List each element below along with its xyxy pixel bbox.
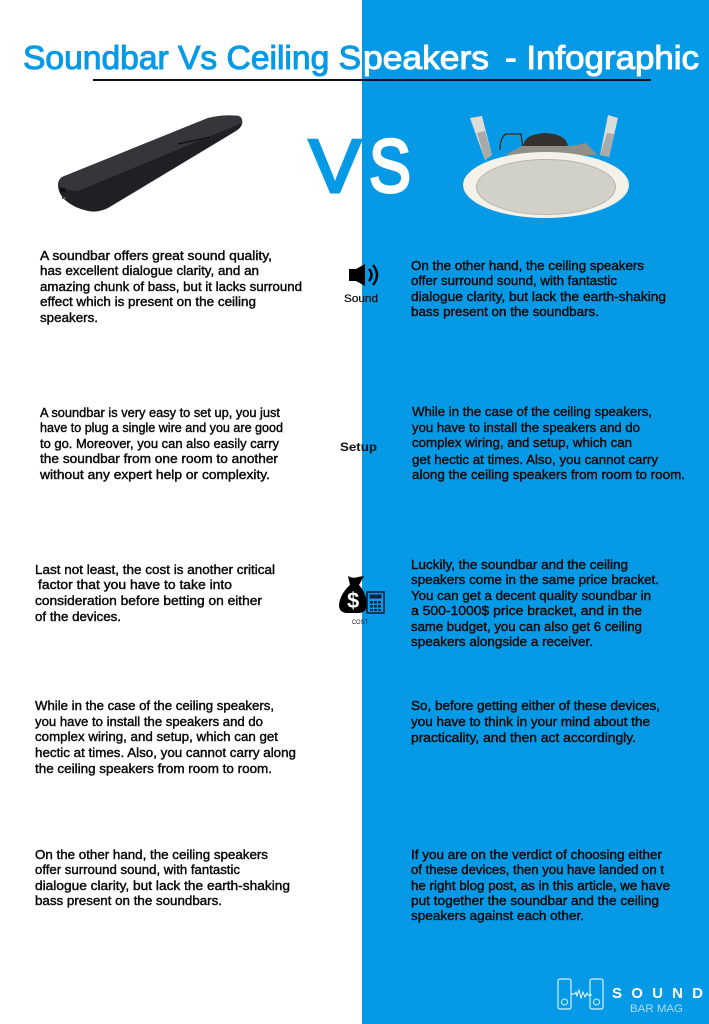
text block: ceiling speakers setup: get hectic at times. Also, you cannot carry xyxy=(412,452,659,467)
icon: soundbar product xyxy=(58,115,242,212)
text block: ceiling speakers sound: On the other hand, the ceiling speakers xyxy=(411,258,644,273)
text block: soundbar sound: A soundbar offers great sound quality, xyxy=(40,248,272,263)
text block: ceiling speakers summary xyxy=(35,847,290,908)
icon: money bag and calculator xyxy=(339,576,384,613)
text block: soundbar setup: without any expert help or complexity. xyxy=(39,467,270,482)
text block: ceiling speakers setup: While in the case of the ceiling speakers, xyxy=(412,404,652,419)
text block: ceiling speakers installation: you have to install the speakers and do xyxy=(35,714,263,729)
label: setup: Setup xyxy=(340,440,377,454)
text block: ceiling speakers cost: speakers come in the same price bracket. xyxy=(411,572,659,587)
text block: soundbar sound: speakers. xyxy=(40,310,98,325)
text block: ceiling speakers cost: You can get a decent quality soundbar in xyxy=(411,588,651,603)
text block: verdict: of these devices, then you have landed on t xyxy=(411,862,664,877)
text block: ceiling speakers installation xyxy=(35,698,296,776)
text block: soundbar cost: Last not least, the cost is another critical xyxy=(35,562,275,577)
text block: ceiling speakers setup: along the ceiling speakers from room to room. xyxy=(412,467,685,482)
text block: ceiling speakers sound: dialogue clarity, but lack the earth-shaking xyxy=(411,289,666,304)
text block: soundbar setup: the soundbar from one room to another xyxy=(40,451,279,466)
text block: soundbar cost xyxy=(35,562,275,624)
text block: ceiling speakers cost xyxy=(411,557,659,649)
logo: Sound Bar Mag: SOUND xyxy=(612,985,703,1002)
title: - Infographic xyxy=(505,39,699,76)
text block: soundbar cost: consideration before betting on either xyxy=(35,593,263,608)
logo: Sound Bar Mag xyxy=(558,979,703,1015)
text block: ceiling speakers summary: offer surround sound, with fantastic xyxy=(35,862,240,877)
text block: ceiling speakers installation: While in the case of the ceiling speakers, xyxy=(35,698,274,713)
label: sound: Sound xyxy=(344,293,378,305)
text block: soundbar setup: to go. Moreover, you can also easily carry xyxy=(40,436,279,451)
text block: ceiling speakers summary: On the other hand, the ceiling speakers xyxy=(35,847,268,862)
title underline xyxy=(93,79,651,81)
text block: soundbar setup: have to plug a single wire and you are good xyxy=(40,420,283,435)
text block: ceiling speakers summary: dialogue clarity, but lack the earth-shaking xyxy=(35,878,290,893)
text block: soundbar sound: effect which is present on the ceiling xyxy=(40,294,256,309)
text block: ceiling speakers setup: you have to install the speakers and do xyxy=(412,420,640,435)
panel: blue right half background xyxy=(362,0,709,1024)
text block: ceiling speakers installation: hectic at times. Also, you cannot carry along xyxy=(35,745,296,760)
text block: verdict: If you are on the verdict of choosing either xyxy=(411,847,663,862)
text block: ceiling speakers sound xyxy=(411,258,666,319)
text block: ceiling speakers cost: Luckily, the soundbar and the ceiling xyxy=(411,557,628,572)
text block: verdict: he right blog post, as in this article, we have xyxy=(411,878,670,893)
text block: practicality advice: you have to think in your mind about the xyxy=(411,714,650,729)
text block: ceiling speakers installation: complex wiring, and setup, which can get xyxy=(35,729,278,744)
text block: ceiling speakers setup xyxy=(412,404,685,482)
logo: Sound Bar Mag: BAR MAG xyxy=(630,1003,683,1015)
text block: ceiling speakers cost: speakers alongside a receiver. xyxy=(411,634,593,649)
text block: soundbar sound xyxy=(40,248,302,325)
text block: soundbar sound: amazing chunk of bass, but it lacks surround xyxy=(40,279,302,294)
title xyxy=(23,39,699,76)
text block: ceiling speakers summary: bass present on the soundbars. xyxy=(35,893,222,908)
text block: soundbar cost: factor that you have to take into xyxy=(38,577,232,592)
text block: ceiling speakers cost: a 500-1000$ price bracket, and in the xyxy=(411,603,642,618)
text block: soundbar setup: A soundbar is very easy to set up, you just xyxy=(40,405,280,420)
title: peakers xyxy=(363,39,489,76)
title: Soundbar Vs Ceiling S xyxy=(23,39,361,76)
text block: ceiling speakers installation: the ceiling speakers from room to room. xyxy=(35,761,272,776)
text block: soundbar sound: has excellent dialogue clarity, and an xyxy=(40,263,259,278)
text block: ceiling speakers cost: same budget, you can also get 6 ceiling xyxy=(411,619,642,634)
VS heading xyxy=(309,124,411,208)
text block: soundbar setup xyxy=(39,405,283,482)
label: cost: COST xyxy=(352,620,368,626)
text block: verdict: put together the soundbar and the ceiling xyxy=(411,893,659,908)
VS heading: S xyxy=(369,124,411,208)
text block: practicality advice: So, before getting either of these devices, xyxy=(411,698,660,713)
text block: ceiling speakers setup: complex wiring, and setup, which can xyxy=(412,435,632,450)
text block: verdict xyxy=(411,847,670,923)
icon: ceiling speaker product xyxy=(463,115,629,218)
VS heading: V xyxy=(309,124,361,208)
text block: ceiling speakers sound: offer surround sound, with fantastic xyxy=(411,273,617,288)
text block: practicality advice xyxy=(411,698,660,745)
text block: soundbar cost: of the devices. xyxy=(35,609,121,624)
text block: ceiling speakers sound: bass present on the soundbars. xyxy=(411,304,599,319)
text block: verdict: speakers against each other. xyxy=(411,908,584,923)
icon: sound xyxy=(349,264,377,286)
icon: money bag and calculator: $ xyxy=(347,588,359,613)
text block: practicality advice: practicality, and then act accordingly. xyxy=(411,730,636,745)
